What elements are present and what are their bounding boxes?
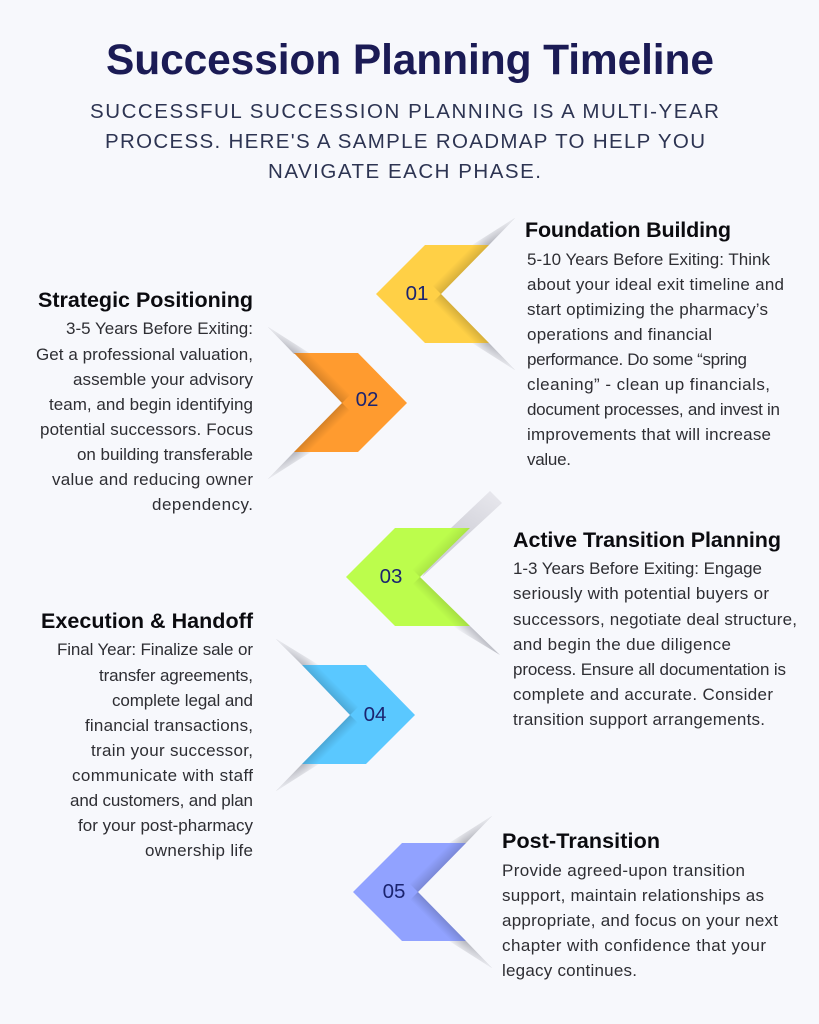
text: strategic positioning body: team, and begin identifying bbox=[49, 395, 253, 414]
heading: foundation building: Foundation Building bbox=[525, 218, 731, 242]
chevron 01: 01 bbox=[406, 282, 428, 305]
text: strategic positioning body: value and reducing owner bbox=[52, 470, 253, 489]
text: strategic positioning body: assemble your advisory bbox=[73, 370, 254, 389]
text: post-transition body: legacy continues. bbox=[502, 961, 637, 980]
text: post-transition body: chapter with confidence that your bbox=[502, 936, 766, 955]
panel: post-transition bbox=[502, 829, 778, 980]
text: post-transition body: Provide agreed-upon transition bbox=[502, 861, 745, 880]
text: active transition planning body: and begin the due diligence bbox=[513, 635, 731, 654]
text: strategic positioning body: dependency. bbox=[152, 495, 253, 514]
text: execution and handoff body: complete legal and bbox=[112, 691, 253, 710]
panel: execution and handoff bbox=[41, 609, 254, 860]
text: post-transition body bbox=[502, 861, 778, 980]
text: strategic positioning body: Get a professional valuation, bbox=[36, 345, 253, 364]
text: active transition planning body: process. Ensure all documentation is bbox=[513, 660, 786, 679]
text: execution and handoff body: ownership life bbox=[145, 841, 253, 860]
chevron 04 bbox=[276, 639, 415, 791]
chevron 01 bbox=[376, 218, 515, 370]
chevron 04: 04 bbox=[364, 703, 386, 726]
text: foundation building body: start optimizing the pharmacy’s bbox=[527, 300, 768, 319]
text: execution and handoff body: and customers, and plan bbox=[70, 791, 253, 810]
text: active transition planning body: successors, negotiate deal structure, bbox=[513, 610, 797, 629]
chevron 03 bbox=[346, 491, 502, 655]
text: active transition planning body: transition support arrangements. bbox=[513, 710, 765, 729]
text: foundation building body: cleaning” - clean up financials, bbox=[527, 375, 770, 394]
text: execution and handoff body: Final Year: Finalize sale or bbox=[57, 640, 253, 659]
subtitle: NAVIGATE EACH PHASE. bbox=[268, 160, 541, 183]
text: execution and handoff body: communicate with staff bbox=[72, 766, 253, 785]
text: active transition planning body: complete and accurate. Consider bbox=[513, 685, 773, 704]
text: foundation building body: improvements that will increase bbox=[527, 425, 771, 444]
panel: active transition planning bbox=[513, 528, 797, 729]
panel: strategic positioning bbox=[36, 288, 254, 514]
text: post-transition body: support, maintain relationships as bbox=[502, 886, 764, 905]
text: active transition planning body bbox=[513, 559, 797, 729]
text: foundation building body: 5-10 Years Before Exiting: Think bbox=[527, 250, 770, 269]
heading: strategic positioning: Strategic Positioning bbox=[38, 288, 253, 312]
subtitle: PROCESS. HERE'S A SAMPLE ROADMAP TO HELP YOU bbox=[105, 130, 705, 153]
text: execution and handoff body: financial transactions, bbox=[85, 716, 253, 735]
text: strategic positioning body: potential successors. Focus bbox=[40, 420, 253, 439]
text: strategic positioning body: 3-5 Years Before Exiting: bbox=[66, 319, 253, 338]
text: foundation building body: about your ideal exit timeline and bbox=[527, 275, 784, 294]
text: foundation building body: operations and financial bbox=[527, 325, 712, 344]
text: strategic positioning body: on building transferable bbox=[77, 445, 253, 464]
heading: active transition planning: Active Transition Planning bbox=[513, 528, 781, 552]
text: strategic positioning body bbox=[36, 319, 254, 514]
panel: foundation building bbox=[525, 218, 784, 469]
text: foundation building body: value. bbox=[527, 450, 571, 469]
text: execution and handoff body: train your successor, bbox=[91, 741, 253, 760]
text: foundation building body bbox=[527, 250, 784, 469]
text: active transition planning body: 1-3 Years Before Exiting: Engage bbox=[513, 559, 762, 578]
text: active transition planning body: seriously with potential buyers or bbox=[513, 584, 769, 603]
subtitle: SUCCESSFUL SUCCESSION PLANNING IS A MULTI-YEAR bbox=[90, 100, 719, 123]
chevron 02: 02 bbox=[356, 388, 378, 411]
heading: post-transition: Post-Transition bbox=[502, 829, 660, 853]
subtitle bbox=[90, 100, 719, 183]
text: execution and handoff body: for your post-pharmacy bbox=[78, 816, 254, 835]
text: foundation building body: document processes, and invest in bbox=[527, 400, 780, 419]
text: foundation building body: performance. Do some “spring bbox=[527, 350, 747, 369]
title: Succession Planning Timeline bbox=[106, 37, 714, 84]
chevron 03: 03 bbox=[380, 565, 402, 588]
text: execution and handoff body bbox=[57, 640, 254, 860]
heading: execution and handoff: Execution & Handoff bbox=[41, 609, 254, 633]
text: execution and handoff body: transfer agreements, bbox=[99, 666, 253, 685]
chevron 05 bbox=[353, 816, 492, 968]
text: post-transition body: appropriate, and focus on your next bbox=[502, 911, 778, 930]
chevron 05: 05 bbox=[383, 880, 405, 903]
chevron 02 bbox=[268, 327, 407, 479]
